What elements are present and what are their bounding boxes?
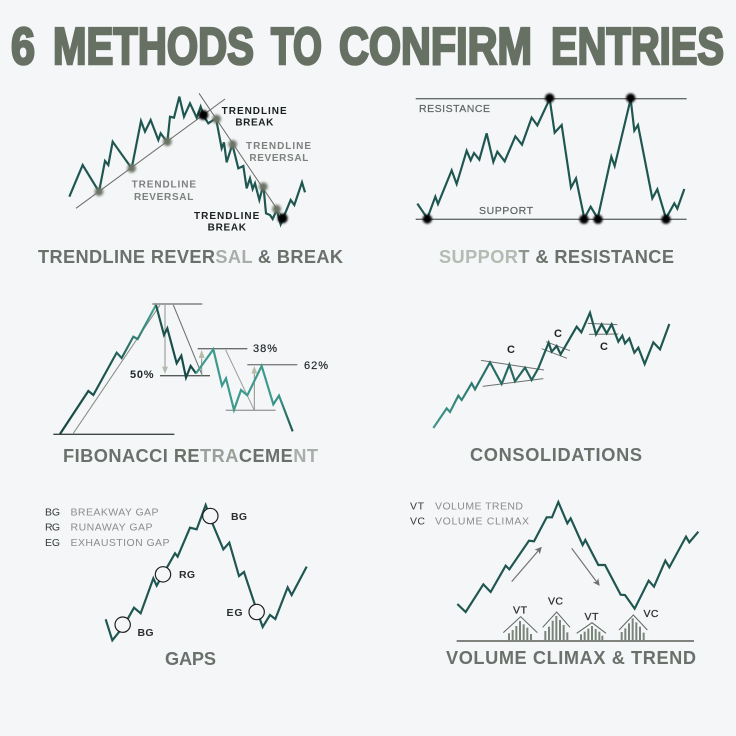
label: trendline break top: TRENDLINE — [222, 106, 287, 117]
legend: BG — [45, 507, 60, 519]
label: 50%: 50% — [130, 369, 154, 381]
chart: volume chart — [457, 502, 698, 641]
label: trendline reversal left — [132, 179, 196, 203]
title — [11, 18, 724, 76]
legend: RUNAWAY GAP — [70, 522, 152, 534]
chart: gaps chart — [106, 505, 307, 640]
legend: VOLUME TREND — [435, 500, 523, 512]
arrow: up trend — [512, 548, 541, 582]
chart: trendline chart — [69, 93, 305, 224]
label: BG upper: BG — [231, 511, 247, 523]
label: support: SUPPORT — [479, 205, 534, 217]
chart: fibonacci chart — [53, 304, 297, 434]
title: TO — [271, 18, 322, 76]
label: C middle: C — [554, 328, 562, 340]
label: trendline reversal left: TRENDLINE — [132, 179, 196, 190]
heading: FIBONACCI RETRACEMENT — [63, 446, 318, 466]
title: CONFIRM — [339, 18, 532, 76]
title: METHODS — [53, 18, 254, 76]
label: trendline break bottom: TRENDLINE — [194, 211, 260, 222]
volume roofs — [503, 612, 647, 633]
legend: VOLUME CLIMAX — [435, 516, 529, 528]
heading: VOLUME CLIMAX & TREND — [446, 648, 696, 668]
legend: VC — [410, 516, 425, 528]
label: C left: C — [507, 344, 515, 356]
label: VC second: VC — [644, 608, 659, 620]
volume bars — [508, 616, 645, 641]
chart: support resistance chart — [416, 93, 687, 224]
label: EG: EG — [226, 607, 242, 619]
label: VT first: VT — [513, 604, 528, 616]
label: resistance: RESISTANCE — [419, 103, 490, 115]
label: trendline break top: BREAK — [235, 118, 274, 129]
legend — [45, 507, 170, 549]
panel: trendline reversal and break — [38, 93, 343, 267]
panel: consolidations — [433, 313, 669, 465]
label: trendline reversal right — [246, 141, 311, 164]
label: trendline reversal right: TRENDLINE — [246, 141, 311, 152]
arrow: down trend — [572, 548, 599, 585]
label: C right: C — [600, 341, 608, 353]
heading: TRENDLINE REVERSAL & BREAK — [38, 247, 343, 267]
label: VT second: VT — [584, 611, 599, 623]
label: BG lower: BG — [138, 627, 154, 639]
label: trendline break bottom — [194, 211, 260, 234]
label: VC first: VC — [548, 596, 563, 608]
panel: volume climax and trend — [410, 500, 698, 668]
label: trendline break top — [222, 106, 287, 129]
legend: BREAKWAY GAP — [70, 507, 158, 519]
panel: gaps — [45, 505, 307, 669]
label: 62%: 62% — [304, 360, 328, 372]
legend: RG — [45, 522, 60, 534]
legend — [410, 500, 529, 528]
label: trendline break bottom: BREAK — [208, 223, 247, 234]
chart: consolidations chart — [433, 313, 669, 428]
panel: support and resistance — [416, 93, 687, 267]
label: 38%: 38% — [253, 343, 277, 355]
label: trendline reversal left: REVERSAL — [134, 192, 193, 203]
legend: EG — [45, 537, 60, 549]
title: 6 — [11, 18, 35, 76]
panel: fibonacci retracement — [53, 304, 328, 466]
label: RG: RG — [179, 569, 195, 581]
heading: CONSOLIDATIONS — [470, 445, 642, 465]
heading: GAPS — [165, 649, 216, 669]
heading: SUPPORT & RESISTANCE — [439, 247, 674, 267]
legend: VT — [410, 500, 425, 512]
label: trendline reversal right: REVERSAL — [249, 153, 308, 164]
legend: EXHAUSTION GAP — [70, 537, 170, 549]
